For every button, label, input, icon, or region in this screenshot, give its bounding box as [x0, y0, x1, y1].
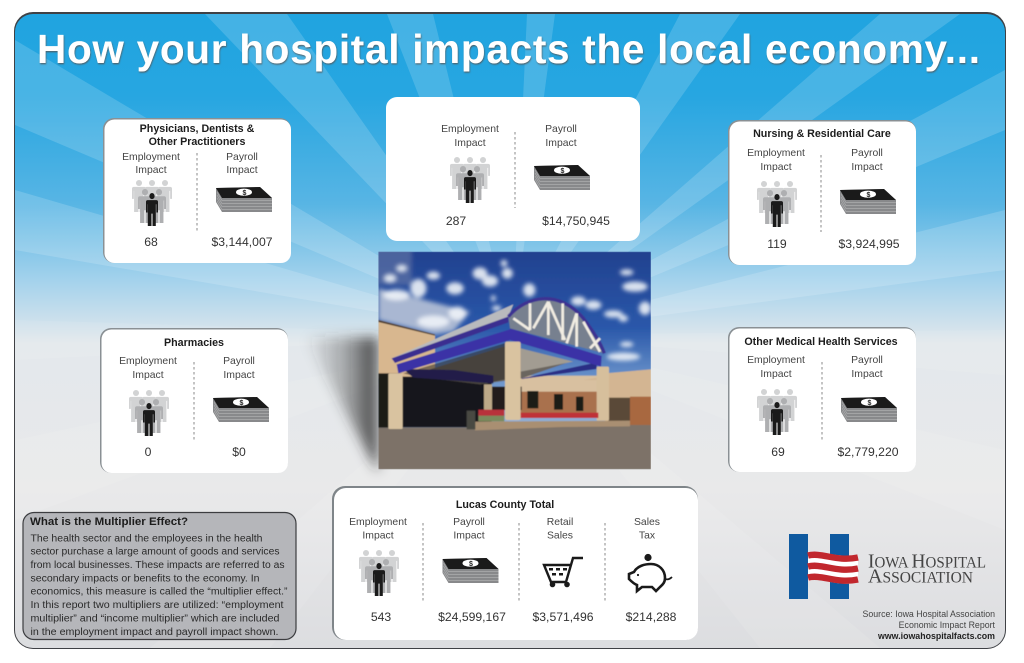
source note [862, 609, 996, 641]
panel: physicians, dentists and other practitioners [103, 118, 291, 263]
body text: multiplier” and “income multiplier” which are included [30, 614, 280, 624]
heading: physicians: Physicians, Dentists & [140, 123, 255, 135]
icon: money stack [840, 189, 896, 214]
icon: piggy bank [629, 554, 672, 591]
panel: multiplier effect [23, 512, 296, 640]
employment label: Impact [135, 165, 167, 176]
title: How your hospital impacts the local economy... [37, 26, 980, 72]
icon: money stack: $ [867, 192, 871, 199]
icon: money stack [841, 397, 897, 422]
retail label: Sales [547, 530, 573, 542]
icon: money stack: $ [240, 400, 244, 407]
body text [30, 534, 288, 638]
hospital photo [375, 248, 651, 469]
employment label: Impact [760, 162, 792, 173]
icon: money stack [213, 397, 269, 422]
heading: multiplier effect: What is the Multiplier Effect? [30, 516, 188, 528]
heading: pharmacies: Pharmacies [164, 337, 224, 349]
sales tax label: Sales [634, 517, 660, 528]
value: employment: 69 [771, 445, 785, 459]
icon: shopping cart [544, 558, 583, 587]
body text: The health sector and the employees in the health [30, 534, 262, 544]
icon: money stack [442, 558, 498, 583]
panel: other medical health services [728, 327, 916, 472]
employment label: Employment [119, 356, 177, 367]
icon: people [359, 550, 399, 596]
sales tax label: Tax [639, 530, 656, 542]
retail label: Retail [547, 517, 573, 528]
icon: people [757, 389, 797, 435]
panel: hospital [386, 97, 640, 241]
employment label: Employment [747, 355, 805, 366]
heading: nursing: Nursing & Residential Care [753, 128, 891, 140]
body text: in the employment impact and payroll impact shown. [30, 627, 278, 638]
value: payroll: $0 [232, 445, 246, 459]
payroll label: Payroll [226, 152, 258, 163]
value: employment: 119 [767, 237, 787, 251]
payroll label: Impact [545, 138, 577, 149]
logo: Iowa Hospital Association: IOWA HOSPITAL [868, 550, 986, 572]
icon: money stack: $ [469, 561, 473, 568]
payroll label: Impact [453, 530, 485, 542]
payroll label: Payroll [545, 124, 577, 135]
value: payroll: $14,750,945 [542, 214, 610, 228]
employment label: Impact [362, 530, 394, 542]
icon: people [450, 157, 490, 203]
heading: other medical: Other Medical Health Services [744, 336, 898, 348]
icon: people [757, 181, 797, 227]
panel: nursing and residential care [728, 120, 916, 265]
icon: money stack [534, 165, 590, 190]
payroll label: Impact [851, 162, 883, 173]
employment label: Impact [454, 138, 486, 149]
icon: money stack: $ [243, 190, 247, 197]
panel: county total [332, 486, 698, 640]
panel: pharmacies [100, 328, 288, 473]
employment label: Impact [132, 370, 164, 381]
value: sales tax: $214,288 [626, 610, 677, 624]
body text: economics, this measure is called the “multiplier effect.” [30, 586, 288, 598]
payroll label: Impact [851, 369, 883, 380]
employment label: Employment [122, 152, 180, 163]
icon: money stack: $ [868, 400, 872, 407]
value: payroll: $2,779,220 [838, 445, 899, 459]
source note: www.iowahospitalfacts.com [877, 631, 995, 641]
employment label: Employment [441, 124, 499, 135]
value: payroll: $3,924,995 [838, 237, 900, 251]
value: retail sales: $3,571,496 [532, 610, 594, 624]
payroll label: Payroll [453, 517, 485, 528]
heading: county total: Lucas County Total [456, 499, 554, 511]
body text: sector purchase a large amount of goods and services [30, 546, 280, 558]
icon: money stack: $ [561, 168, 565, 175]
employment label: Employment [349, 517, 407, 528]
employment label: Impact [760, 369, 792, 380]
employment label: Employment [747, 148, 805, 159]
source note: Source: Iowa Hospital Association [862, 609, 995, 619]
body text: from local businesses. These impacts are referred to as [30, 560, 284, 571]
heading: physicians: Other Practitioners [149, 136, 245, 148]
value: payroll: $24,599,167 [438, 610, 506, 624]
source note: Economic Impact Report [899, 620, 996, 630]
value: employment: 287 [446, 214, 466, 228]
payroll label: Payroll [851, 355, 883, 366]
payroll label: Impact [226, 165, 258, 176]
body text: secondary impacts or benefits to the economy. In [30, 574, 260, 584]
payroll label: Payroll [851, 148, 883, 159]
icon: people [132, 180, 172, 226]
icon: money stack [216, 187, 272, 212]
payroll label: Impact [223, 370, 255, 381]
logo: Iowa Hospital Association: ASSOCIATION [868, 566, 973, 588]
icon: people [129, 390, 169, 436]
body text: In this report two multipliers are utilized: “employment [30, 600, 284, 611]
payroll label: Payroll [223, 356, 255, 367]
value: employment: 543 [371, 610, 391, 624]
value: employment: 0 [145, 445, 152, 459]
value: employment: 68 [144, 235, 158, 249]
photo drop shadow [305, 337, 378, 472]
logo: Iowa Hospital Association [789, 534, 986, 599]
value: payroll: $3,144,007 [212, 235, 273, 249]
